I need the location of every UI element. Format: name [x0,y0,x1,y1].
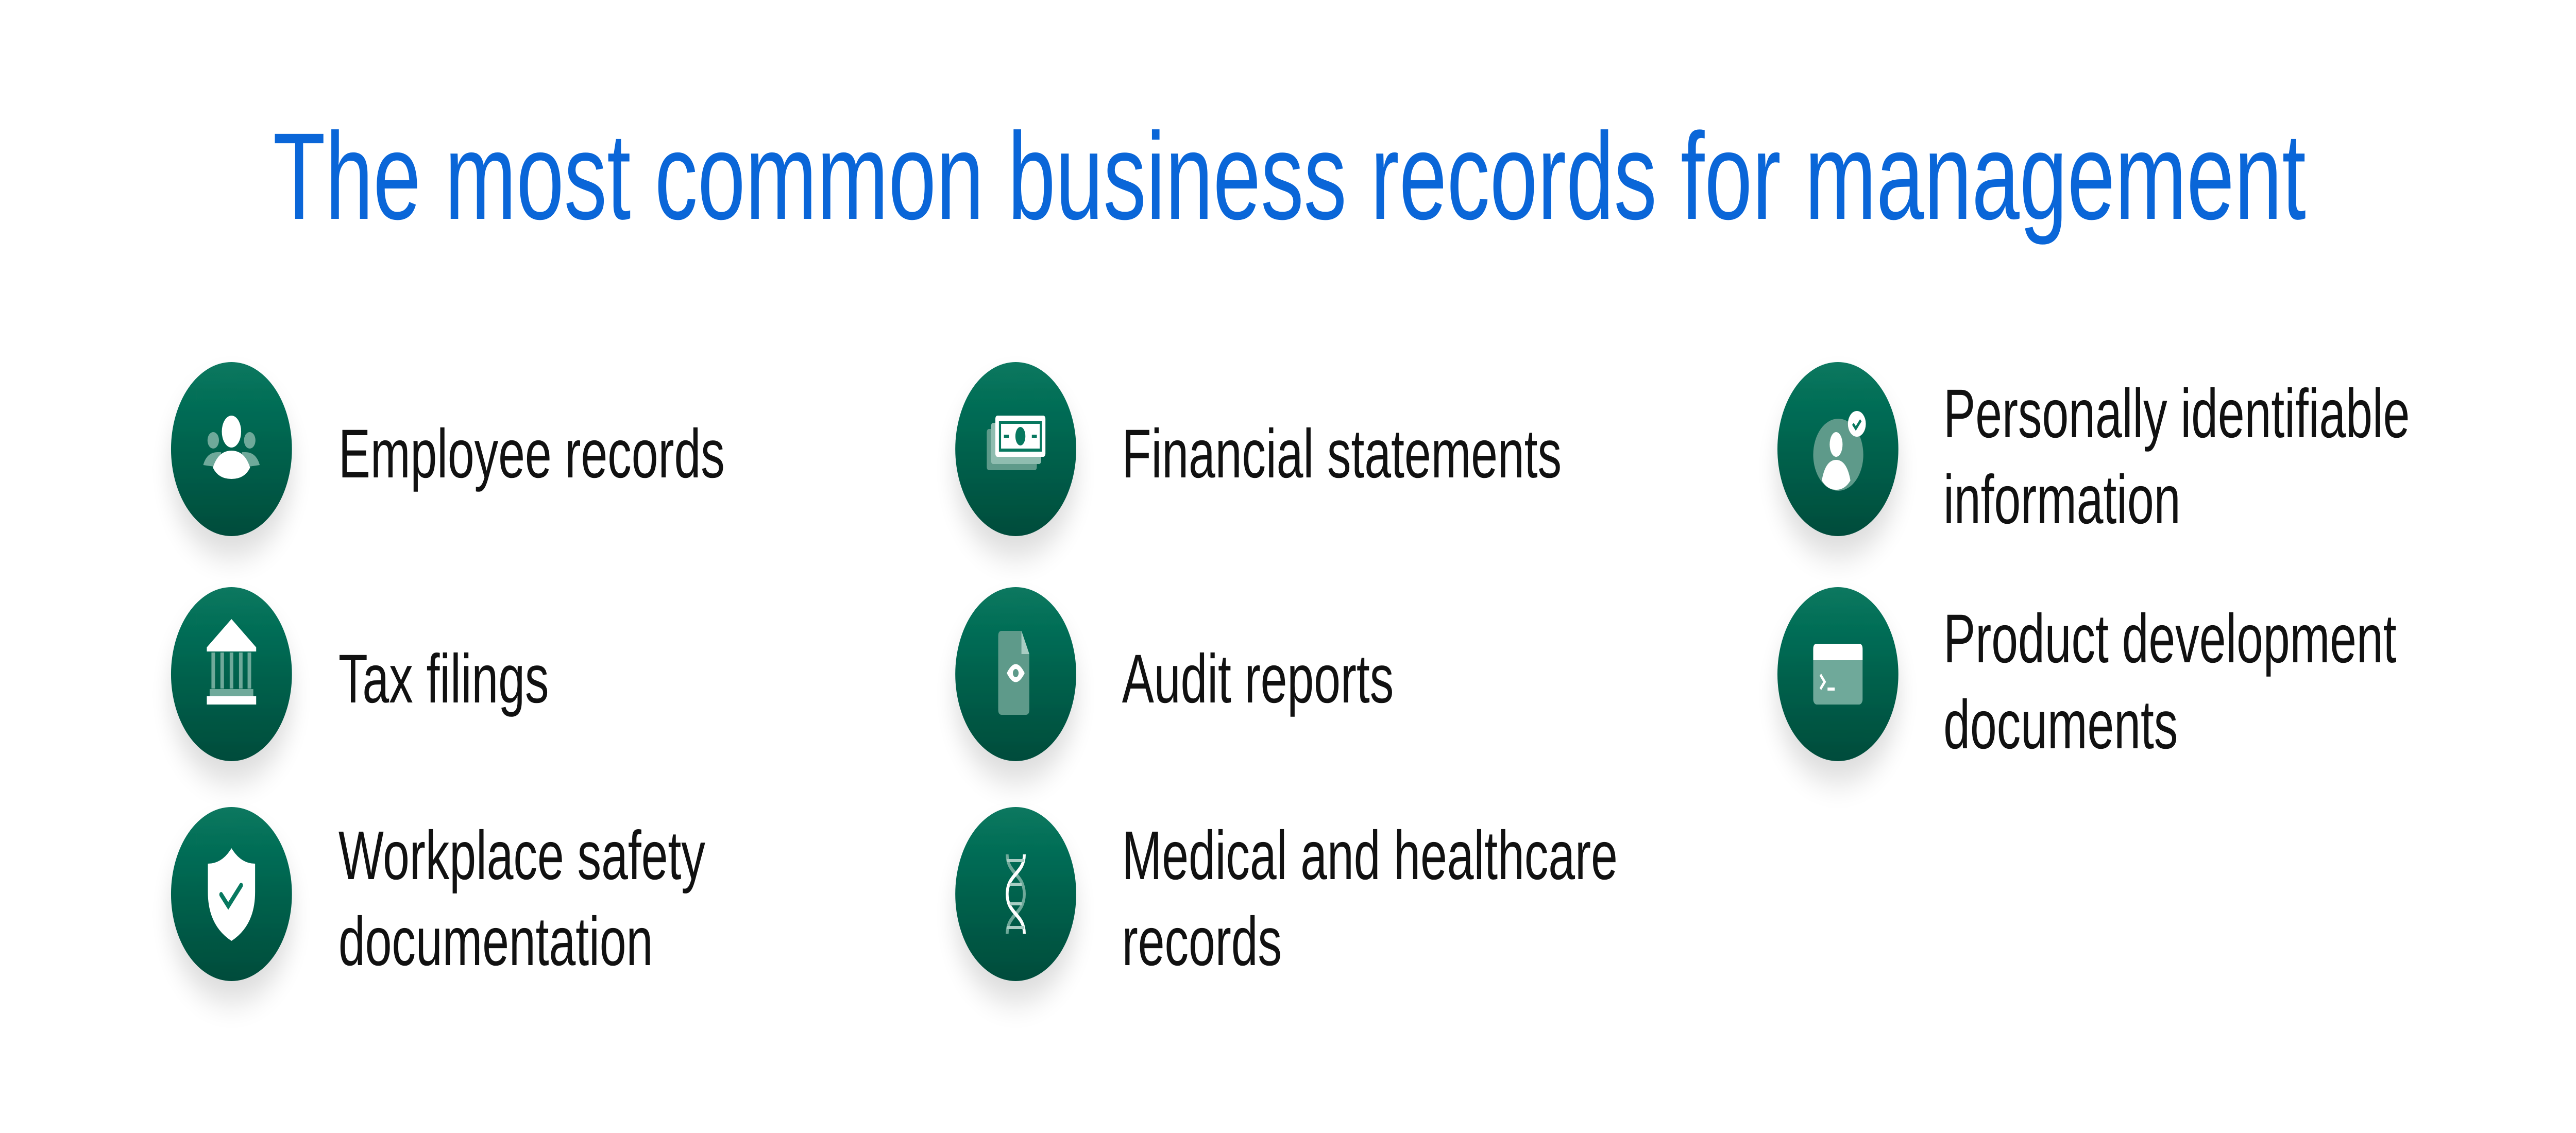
label: workplace safety: Workplace safety [338,817,705,894]
icon: personal id [1777,362,1899,536]
label: personally identifiable: Personally identifiable [1943,375,2410,452]
icon: dna [955,807,1076,981]
label: product development: Product development [1943,600,2397,677]
icon: employees [171,362,292,536]
label: workplace safety: documentation [338,903,653,980]
icon: audit document [955,587,1076,761]
icon: money [955,362,1076,536]
label: personally identifiable: information [1943,461,2180,538]
title: The most common business records for management [273,107,2306,245]
label: tax filings: Tax filings [338,641,549,717]
label: product development: documents [1943,686,2178,763]
label: medical records: records [1122,903,1282,980]
icon: bank [171,587,292,761]
label: audit reports: Audit reports [1122,641,1394,717]
label: financial statements: Financial statements [1122,416,1562,492]
label: employee records: Employee records [338,416,725,492]
icon: shield [171,807,292,981]
label: medical records: Medical and healthcare [1122,817,1618,894]
icon: terminal [1777,587,1899,761]
